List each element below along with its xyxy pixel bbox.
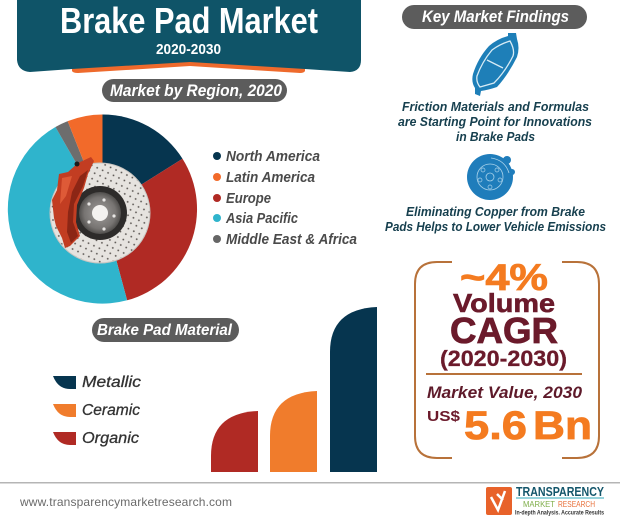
finding text: friction materials	[398, 100, 592, 144]
brake disc and caliper illustration	[50, 157, 150, 263]
orange accent strip	[72, 60, 305, 73]
volume label: Volume	[453, 288, 555, 318]
callout bracket frame	[415, 262, 599, 458]
bar chart: brake pad material	[211, 307, 377, 472]
cagr label: CAGR	[450, 310, 558, 351]
finding text: eliminating copper	[385, 205, 606, 234]
disc	[50, 163, 150, 263]
logo research word: RESEARCH	[558, 499, 595, 509]
legend: regions	[213, 149, 357, 248]
market value figure: 5.6	[464, 404, 527, 448]
icon: brake pad	[472, 33, 518, 96]
market value unit: Bn	[533, 404, 592, 448]
cagr percentage: ~4%	[460, 257, 548, 298]
market value label: Market Value, 2030	[427, 383, 583, 402]
logo market word: MARKET	[523, 499, 555, 509]
finding text: eliminating copper: Eliminating Copper from Brake	[406, 205, 585, 219]
icon: brake disc circle	[467, 154, 515, 200]
finding text: friction materials: in Brake Pads	[456, 130, 535, 144]
slice: north america	[102, 114, 182, 209]
heading pill: brake pad material: Brake Pad Material	[97, 322, 233, 339]
legend item: north america: North America	[226, 149, 320, 165]
pie chart: market by region	[8, 114, 197, 304]
slice: middle east and africa	[55, 121, 102, 209]
title: Brake Pad Market	[60, 0, 318, 41]
bar: ceramic	[270, 391, 317, 472]
slice: latin america	[68, 114, 102, 209]
cagr period: (2020-2030)	[440, 346, 567, 371]
bar: metallic	[330, 307, 377, 472]
banner shape	[17, 0, 361, 72]
legend item: middle east and africa: Middle East & Africa	[226, 232, 357, 248]
heading pill: brake pad material	[92, 318, 239, 342]
bar: organic	[211, 411, 258, 472]
caliper bolt	[74, 162, 80, 166]
slice: europe	[102, 159, 197, 300]
finding text: friction materials: are Starting Point for Innovations	[398, 115, 592, 129]
heading pill: market by region: Market by Region, 2020	[110, 82, 283, 100]
legend: materials	[53, 374, 141, 447]
hub	[73, 186, 127, 240]
callout: CAGR and market value	[415, 257, 599, 458]
heading pill: key market findings: Key Market Findings	[422, 7, 569, 26]
legend item: ceramic: Ceramic	[82, 402, 140, 419]
header banner	[17, 0, 361, 73]
legend item: metallic: Metallic	[82, 374, 141, 391]
legend item: latin america: Latin America	[226, 170, 315, 186]
logo mark	[486, 487, 512, 515]
slice: asia pacific	[8, 127, 127, 304]
finding text: friction materials: Friction Materials and Formulas	[402, 100, 589, 114]
caliper	[52, 157, 94, 248]
legend item: europe: Europe	[226, 191, 271, 207]
subtitle years: 2020-2030	[156, 41, 221, 58]
logo: transparency market research	[486, 484, 604, 516]
currency: US$	[427, 408, 461, 425]
finding text: eliminating copper: Pads Helps to Lower Vehicle Emissions	[385, 220, 606, 234]
callout divider	[426, 373, 582, 375]
legend item: organic: Organic	[82, 430, 139, 447]
legend item: asia pacific: Asia Pacific	[225, 211, 298, 227]
footer website url: www.transparencymarketresearch.com	[19, 495, 232, 509]
